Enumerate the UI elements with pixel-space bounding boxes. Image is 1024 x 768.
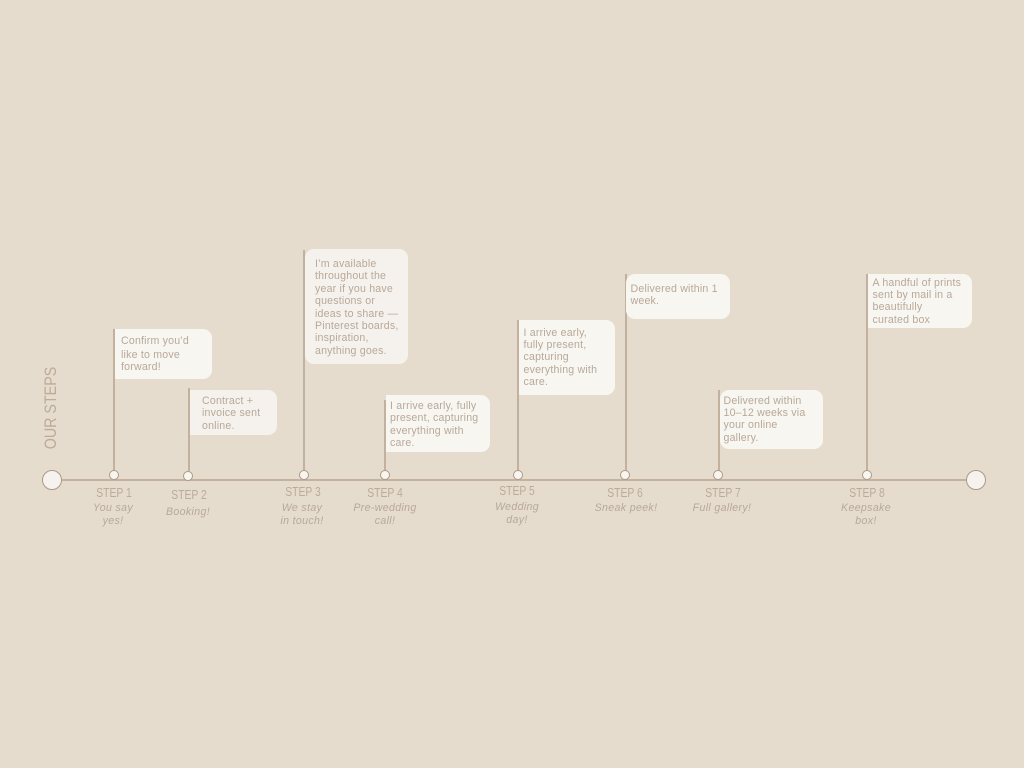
step 8 label: STEP 8 xyxy=(849,486,885,500)
step 8 caption xyxy=(841,502,891,527)
step 1 caption xyxy=(93,502,134,527)
step 5 caption: Wedding xyxy=(495,501,539,513)
step 2 card: online. xyxy=(202,420,235,432)
step 7 card: your online xyxy=(724,419,778,431)
step 6 caption: Sneak peek! xyxy=(595,502,657,514)
step 2 caption: Booking! xyxy=(166,506,210,518)
step 7 card: gallery. xyxy=(724,432,758,444)
step 5 card: I arrive early, xyxy=(524,326,587,338)
step 3 card: Pinterest boards, xyxy=(315,320,398,332)
step 4 card: I arrive early, fully xyxy=(390,400,476,412)
step 1 card: Confirm you’d xyxy=(121,335,189,347)
step 3 card: anything goes. xyxy=(315,345,387,357)
step 5 card: capturing xyxy=(524,351,569,363)
step 2 card: invoice sent xyxy=(202,407,260,419)
step 4 caption xyxy=(353,502,417,527)
step 1 stem xyxy=(113,329,115,471)
step 8 card: sent by mail in a xyxy=(872,289,952,301)
step 6 card: Delivered within 1 xyxy=(630,282,718,294)
step 3 card: questions or xyxy=(315,295,375,307)
step 7 xyxy=(693,390,823,514)
step 4 card: everything with xyxy=(390,425,464,437)
step 6 xyxy=(595,274,730,514)
step 7 label: STEP 7 xyxy=(705,486,741,500)
step 6 label: STEP 6 xyxy=(607,486,643,500)
step 1 card: forward! xyxy=(121,361,161,373)
step 8 card: A handful of prints xyxy=(872,276,961,288)
step 1 caption: yes! xyxy=(103,515,123,527)
step 3 card: ideas to share — xyxy=(315,308,398,320)
step 3 card: I’m available xyxy=(315,258,376,270)
step 2 card xyxy=(190,390,277,435)
step 6 marker xyxy=(620,470,630,480)
step 8 stem xyxy=(866,274,868,471)
step 3 caption: in touch! xyxy=(280,515,324,527)
step 6 card xyxy=(626,274,730,319)
step 2 card: Contract + xyxy=(202,395,253,407)
step 5 stem xyxy=(517,320,519,471)
step 5 card xyxy=(519,320,615,395)
step 3 caption xyxy=(280,502,324,527)
step 5 xyxy=(495,320,615,526)
step 8 card: curated box xyxy=(872,314,930,326)
step 7 card: 10–12 weeks via xyxy=(724,407,805,419)
step 2 label: STEP 2 xyxy=(171,488,207,502)
step 6 stem xyxy=(624,274,626,471)
step 3 card: throughout the xyxy=(315,270,386,282)
step 1 marker xyxy=(109,470,119,480)
step 5 card: everything with xyxy=(524,364,597,376)
heading: our steps: OUR STEPS xyxy=(41,367,60,449)
step 8 card: beautifully xyxy=(872,301,922,313)
step 5 card: fully present, xyxy=(524,339,586,351)
step 5 caption xyxy=(495,501,539,526)
step 7 marker xyxy=(713,470,723,480)
step 3 card: year if you have xyxy=(315,283,393,295)
end circle xyxy=(966,470,986,490)
step 1 label: STEP 1 xyxy=(96,486,132,500)
step 5 caption: day! xyxy=(506,514,528,526)
timeline axis xyxy=(60,479,968,481)
step 4 caption: Pre-wedding xyxy=(353,502,417,514)
step 6 card: week. xyxy=(630,295,659,307)
step 5 label: STEP 5 xyxy=(499,484,535,498)
step 8 caption: Keepsake xyxy=(841,502,891,514)
step 8 card xyxy=(868,274,972,328)
step 3 marker xyxy=(299,470,309,480)
step 4 label: STEP 4 xyxy=(367,486,403,500)
step 4 stem xyxy=(384,400,386,470)
step 7 card xyxy=(720,390,823,449)
step 7 stem xyxy=(718,390,720,471)
step 7 caption: Full gallery! xyxy=(693,502,751,514)
start circle xyxy=(42,470,62,490)
step 3 card: inspiration, xyxy=(315,332,369,344)
step 3 card xyxy=(305,249,408,364)
step 2 stem xyxy=(188,388,190,471)
step 8 xyxy=(841,274,972,527)
step 1 card: like to move xyxy=(121,348,180,360)
step 5 card: care. xyxy=(524,376,548,388)
step 4 card: care. xyxy=(390,437,415,449)
step 8 caption: box! xyxy=(855,515,877,527)
step 3 caption: We stay xyxy=(282,502,322,514)
step 4 caption: call! xyxy=(375,515,395,527)
step 4 card xyxy=(386,395,490,452)
step 1 caption: You say xyxy=(93,502,133,514)
step 2 xyxy=(166,388,277,518)
step 4 card: present, capturing xyxy=(390,412,478,424)
step 5 marker xyxy=(513,470,523,480)
step 1 xyxy=(93,329,212,527)
step 3 label: STEP 3 xyxy=(285,485,321,499)
step 4 marker xyxy=(380,470,390,480)
step 8 marker xyxy=(862,470,872,480)
step 2 marker xyxy=(183,470,193,480)
step 3 stem xyxy=(303,250,305,471)
step 1 card xyxy=(115,329,212,379)
step 7 card: Delivered within xyxy=(724,394,801,406)
step 3 xyxy=(280,249,408,527)
step 4 xyxy=(353,395,490,527)
